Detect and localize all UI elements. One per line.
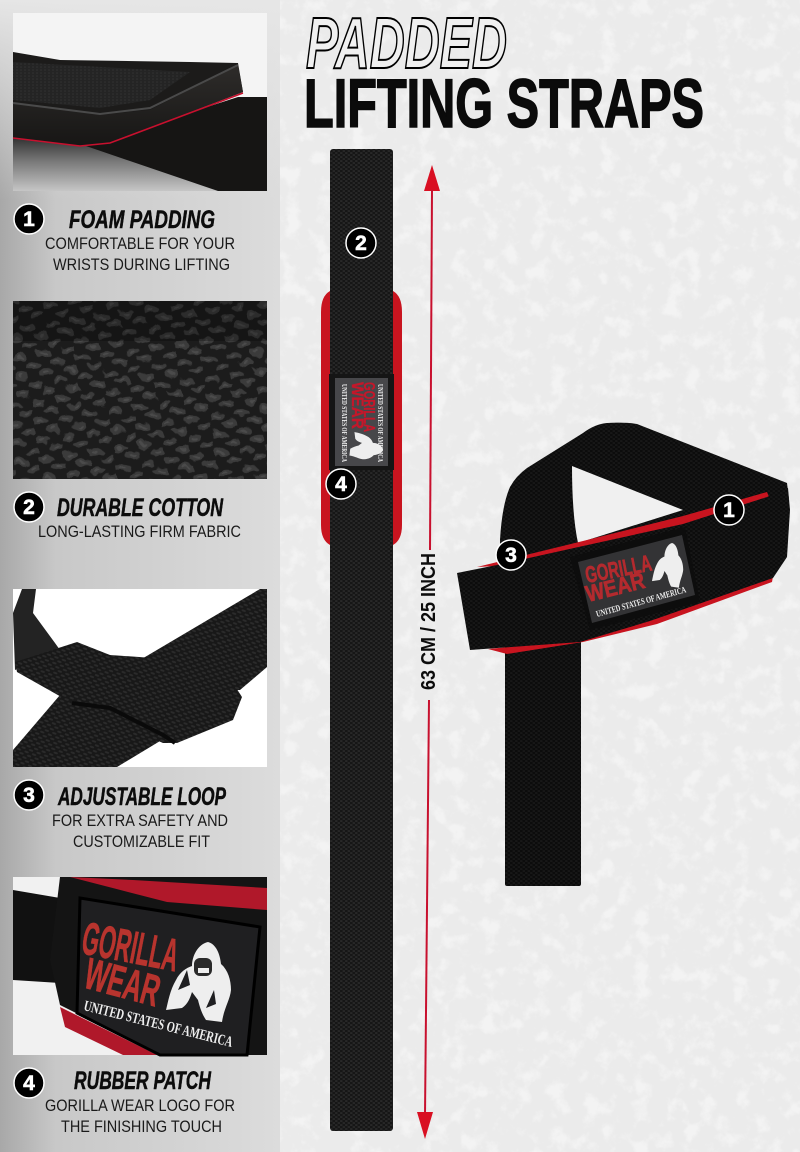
tail — [505, 630, 581, 886]
red padding — [321, 291, 402, 545]
description: rubber patch: THE FINISHING TOUCH — [61, 1117, 222, 1136]
left panel background — [0, 0, 280, 1152]
panel: durable cotton — [0, 290, 290, 541]
vertical strap — [321, 149, 402, 1131]
description: foam padding: WRISTS DURING LIFTING — [53, 255, 230, 274]
front band — [457, 488, 790, 650]
panel: foam padding — [13, 13, 267, 274]
badge 2: 2 — [23, 496, 35, 519]
badge 1 on loop: 1 — [723, 499, 735, 522]
rubber patch: UNITED STATES OF AMERICA — [595, 584, 687, 619]
rubber patch on strap: WEAR — [348, 382, 367, 429]
photo: cotton fabric — [13, 301, 267, 479]
description: foam padding — [45, 234, 235, 274]
panel: rubber patch — [13, 877, 267, 1136]
photo: rubber patch — [13, 877, 267, 1055]
strap body — [330, 149, 393, 1131]
badge 4: 4 — [23, 1072, 35, 1095]
photo: rubber patch: UNITED STATES OF AMERICA — [82, 998, 234, 1051]
badge 3 on loop — [496, 540, 526, 570]
badge 3 — [14, 780, 44, 810]
badge 3: 3 — [23, 784, 35, 807]
heading: foam padding: FOAM PADDING — [69, 206, 215, 234]
heading: adjustable loop: ADJUSTABLE LOOP — [57, 783, 226, 811]
looped strap — [457, 423, 790, 886]
description: adjustable loop: CUSTOMIZABLE FIT — [73, 832, 210, 851]
badge 2 on strap — [346, 228, 376, 258]
panel: adjustable loop — [13, 589, 267, 851]
length label: 63 CM / 25 INCH — [418, 553, 440, 690]
description: durable cotton: LONG-LASTING FIRM FABRIC — [38, 522, 241, 541]
title — [304, 4, 704, 142]
photo: foam padding — [13, 13, 267, 191]
rubber patch on strap: UNITED STATES OF AMERICA — [376, 384, 385, 462]
photo: adjustable loop — [13, 589, 267, 767]
description: rubber patch — [45, 1096, 235, 1136]
description: rubber patch: GORILLA WEAR LOGO FOR — [45, 1096, 235, 1115]
photo: rubber patch: GORILLA — [78, 912, 183, 981]
red padding edges — [477, 492, 769, 567]
badge 2 — [14, 492, 44, 522]
badge 1 — [14, 204, 44, 234]
description: foam padding: COMFORTABLE FOR YOUR — [45, 234, 235, 253]
badge 4 — [14, 1068, 44, 1098]
badge 1: 1 — [23, 208, 35, 231]
heading: rubber patch: RUBBER PATCH — [74, 1067, 212, 1095]
rubber patch: GORILLA — [583, 550, 654, 588]
badge 3 on loop: 3 — [505, 544, 517, 567]
rubber patch: WEAR — [583, 567, 648, 607]
heading: durable cotton: DURABLE COTTON — [57, 494, 224, 522]
rubber patch on strap: UNITED STATES OF AMERICA — [340, 384, 349, 462]
title: PADDED — [306, 4, 507, 84]
rubber patch on strap: GORILLA — [360, 382, 377, 432]
badge 2 on strap: 2 — [355, 232, 367, 255]
photo: rubber patch: WEAR — [79, 949, 166, 1016]
badge 4 on strap: 4 — [335, 473, 347, 496]
rubber patch — [570, 527, 700, 630]
badge 4 on strap — [326, 469, 356, 499]
description: adjustable loop — [52, 811, 228, 851]
badge 1 on loop — [714, 495, 744, 525]
loop opening — [572, 466, 683, 543]
loop arch — [500, 423, 789, 590]
length arrow — [417, 165, 440, 1139]
description: adjustable loop: FOR EXTRA SAFETY AND — [52, 811, 228, 830]
rubber patch on strap — [329, 374, 394, 470]
